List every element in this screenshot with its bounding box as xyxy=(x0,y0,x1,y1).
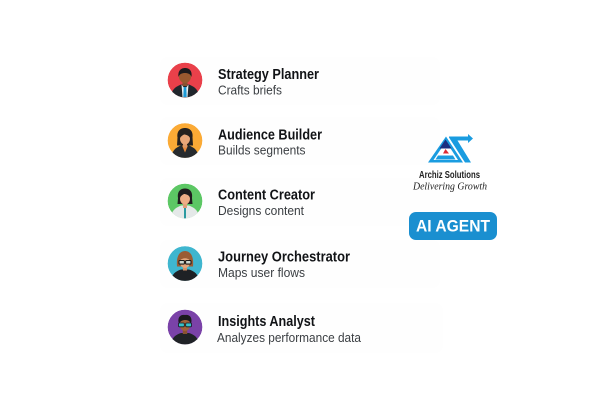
card: Audience Builder xyxy=(168,123,322,158)
text: Analyzes performance data: Analyzes performance data xyxy=(217,330,362,345)
card: Journey Orchestrator xyxy=(168,246,350,281)
badge: AI AGENT xyxy=(409,212,497,240)
icon: journey orchestrator avatar xyxy=(168,246,202,282)
text: Maps user flows: Maps user flows xyxy=(218,265,305,280)
heading: Audience Builder: Audience Builder xyxy=(218,128,322,144)
icon: audience builder avatar xyxy=(168,123,202,158)
logo: Archiz Solutions xyxy=(412,134,487,192)
icon: triangle and arrow mark xyxy=(428,134,473,162)
icon: strategy planner avatar xyxy=(168,63,202,98)
text: Delivering Growth: Delivering Growth xyxy=(412,180,487,192)
heading: Strategy Planner: Strategy Planner xyxy=(218,67,319,83)
card: Content Creator xyxy=(168,184,315,218)
badge: AI AGENT: AI AGENT xyxy=(416,216,491,236)
icon: content creator avatar xyxy=(168,184,202,219)
heading: Content Creator: Content Creator xyxy=(218,188,315,204)
card: Strategy Planner xyxy=(168,62,319,98)
heading: Insights Analyst: Insights Analyst xyxy=(218,314,315,330)
panel: agent roles xyxy=(168,62,361,344)
text: Archiz Solutions: Archiz Solutions xyxy=(419,169,480,181)
card: Insights Analyst xyxy=(168,310,361,344)
text: Designs content: Designs content xyxy=(218,203,304,218)
heading: Journey Orchestrator: Journey Orchestrator xyxy=(218,250,350,266)
text: Builds segments: Builds segments xyxy=(218,142,306,158)
text: Crafts briefs: Crafts briefs xyxy=(218,82,282,98)
icon: insights analyst avatar xyxy=(168,310,202,345)
